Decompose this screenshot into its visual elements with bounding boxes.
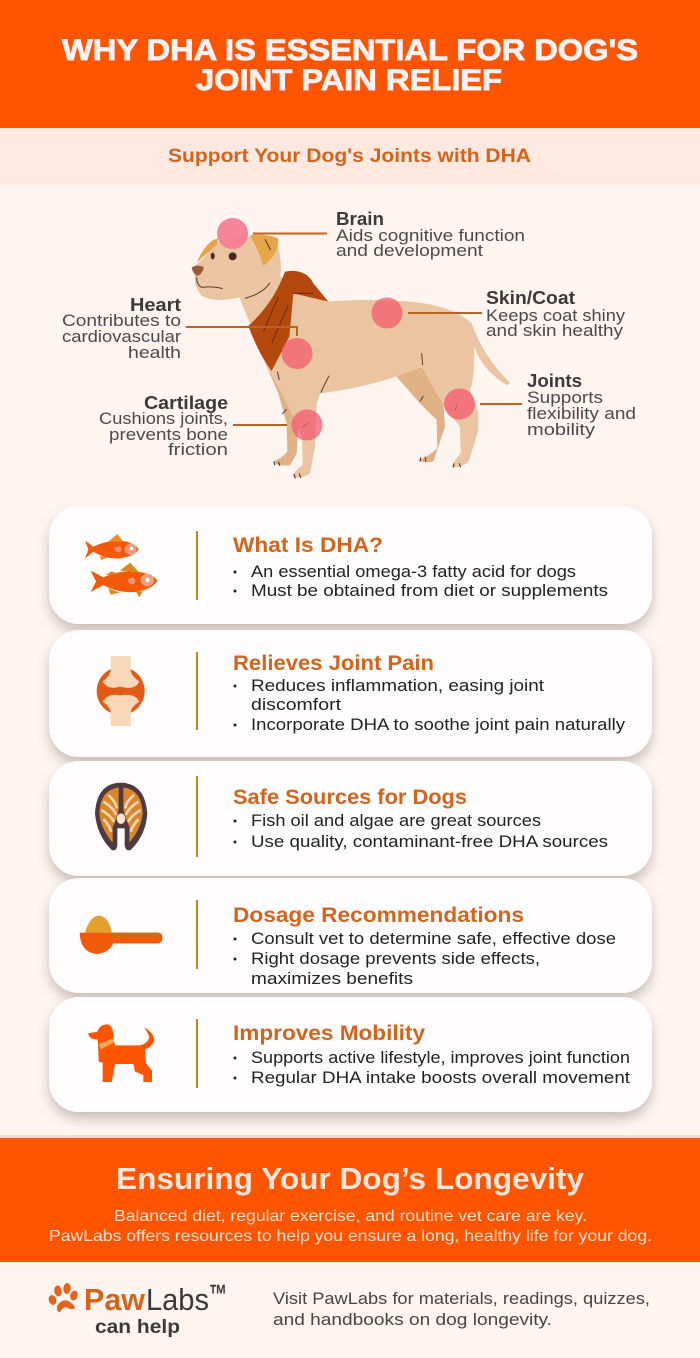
- closing text: [49, 1208, 652, 1245]
- label: skin/coat: [486, 288, 626, 340]
- bullets: Consult vet to determine safe, effective dose: [251, 930, 616, 948]
- label: heart: health: [128, 343, 181, 362]
- bandana: [248, 271, 328, 371]
- heading: Safe Sources for Dogs: [233, 786, 467, 809]
- bullets: [234, 812, 608, 851]
- eyes: [229, 252, 237, 260]
- bullets: [234, 563, 608, 600]
- icon: dog silhouette: [88, 1024, 154, 1082]
- icon: paw: [47, 1283, 79, 1312]
- label: cartilage: Cartilage: [144, 393, 228, 413]
- logo: PawLabs: Paw: [84, 1282, 146, 1317]
- subtitle band: [0, 128, 700, 184]
- panel: relieves joint pain: [49, 630, 652, 757]
- paw toes: [274, 457, 461, 479]
- heading: Relieves Joint Pain: [233, 652, 434, 675]
- label: cartilage: prevents bone: [109, 425, 228, 444]
- marker: joints: [444, 388, 475, 420]
- bullets: [234, 677, 626, 734]
- label: cartilage: [99, 393, 228, 459]
- ears: [197, 238, 218, 263]
- footer text: [273, 1289, 650, 1329]
- head: [192, 236, 281, 323]
- label: heart: Contributes to: [62, 311, 181, 330]
- bullets: Regular DHA intake boosts overall movement: [251, 1069, 630, 1087]
- footer text: and handbooks on dog longevity.: [273, 1310, 552, 1329]
- bullets: Right dosage prevents side effects,: [251, 950, 540, 968]
- dog illustration: [192, 235, 510, 479]
- closing text: PawLabs offers resources to help you ensure a long, healthy life for your dog.: [49, 1228, 652, 1245]
- divider: [196, 1019, 198, 1088]
- bullets: Use quality, contaminant-free DHA sources: [251, 833, 608, 851]
- label: cartilage: friction: [168, 440, 228, 459]
- bullets: maximizes benefits: [251, 970, 413, 988]
- bullets: Supports active lifestyle, improves joint function: [251, 1049, 630, 1067]
- panel: safe sources: [49, 761, 652, 876]
- marker: cartilage: [292, 410, 322, 440]
- divider: [196, 900, 198, 969]
- body: [240, 270, 510, 477]
- label: brain: [336, 209, 525, 260]
- marker: brain: [217, 218, 248, 249]
- face lines: [197, 239, 457, 427]
- label: joints: mobility: [527, 420, 596, 439]
- heading: Dosage Recommendations: [233, 904, 524, 927]
- label: skin/coat: Skin/Coat: [486, 288, 575, 308]
- closing banner: [0, 1135, 700, 1262]
- divider: [196, 531, 198, 600]
- icon: joint: [97, 656, 145, 726]
- label: brain: Aids cognitive function: [336, 226, 525, 245]
- title: [62, 34, 638, 97]
- subtitle band: Support Your Dog's Joints with DHA: [168, 146, 531, 167]
- bullets: Incorporate DHA to soothe joint pain naturally: [251, 716, 626, 734]
- logo: PawLabs: ™: [209, 1279, 227, 1310]
- title: WHY DHA IS ESSENTIAL FOR DOG'S: [62, 34, 638, 67]
- closing text: Balanced diet, regular exercise, and routine vet care are key.: [114, 1208, 587, 1225]
- bullets: [234, 1049, 630, 1087]
- marker: heart: [282, 338, 312, 369]
- label: heart: Heart: [130, 295, 181, 315]
- panel: dosage: [49, 878, 652, 993]
- label: heart: [62, 295, 181, 362]
- logo: PawLabs: Labs: [146, 1282, 209, 1317]
- far legs: [267, 367, 298, 465]
- header banner: [0, 0, 700, 128]
- leader lines: [186, 234, 522, 425]
- label: joints: [527, 371, 636, 439]
- bullets: Fish oil and algae are great sources: [251, 812, 541, 830]
- panel: what is DHA: [49, 506, 652, 624]
- logo: PawLabs: [47, 1279, 227, 1338]
- marker: skin/coat: [372, 298, 402, 328]
- label: skin/coat: and skin healthy: [486, 321, 624, 340]
- bullets: [234, 930, 616, 988]
- logo: PawLabs: can help: [95, 1317, 180, 1338]
- label: joints: Supports: [527, 388, 603, 407]
- icon: salmon steak: [95, 783, 147, 850]
- bullets: discomfort: [251, 696, 341, 714]
- bullets: An essential omega-3 fatty acid for dogs: [251, 563, 576, 581]
- icon: fish: [85, 534, 157, 597]
- closing heading: Ensuring Your Dog’s Longevity: [116, 1161, 585, 1196]
- label: skin/coat: Keeps coat shiny: [486, 306, 626, 325]
- footer text: Visit PawLabs for materials, readings, quizzes,: [273, 1289, 650, 1308]
- heading: What Is DHA?: [233, 534, 383, 557]
- label: heart: cardiovascular: [62, 327, 181, 346]
- bullets: Must be obtained from diet or supplements: [251, 582, 608, 600]
- bullets: Reduces inflammation, easing joint: [251, 677, 544, 695]
- title: JOINT PAIN RELIEF: [196, 64, 502, 97]
- label: brain: and development: [336, 241, 483, 260]
- panel: improves mobility: [49, 997, 652, 1112]
- label: joints: flexibility and: [527, 404, 636, 423]
- divider: [196, 776, 198, 857]
- icon: scoop: [80, 916, 162, 954]
- label: brain: Brain: [336, 209, 384, 229]
- divider: [196, 652, 198, 730]
- nose: [192, 266, 204, 276]
- heading: Improves Mobility: [233, 1022, 425, 1045]
- label: cartilage: Cushions joints,: [99, 409, 228, 428]
- label: joints: Joints: [527, 371, 582, 391]
